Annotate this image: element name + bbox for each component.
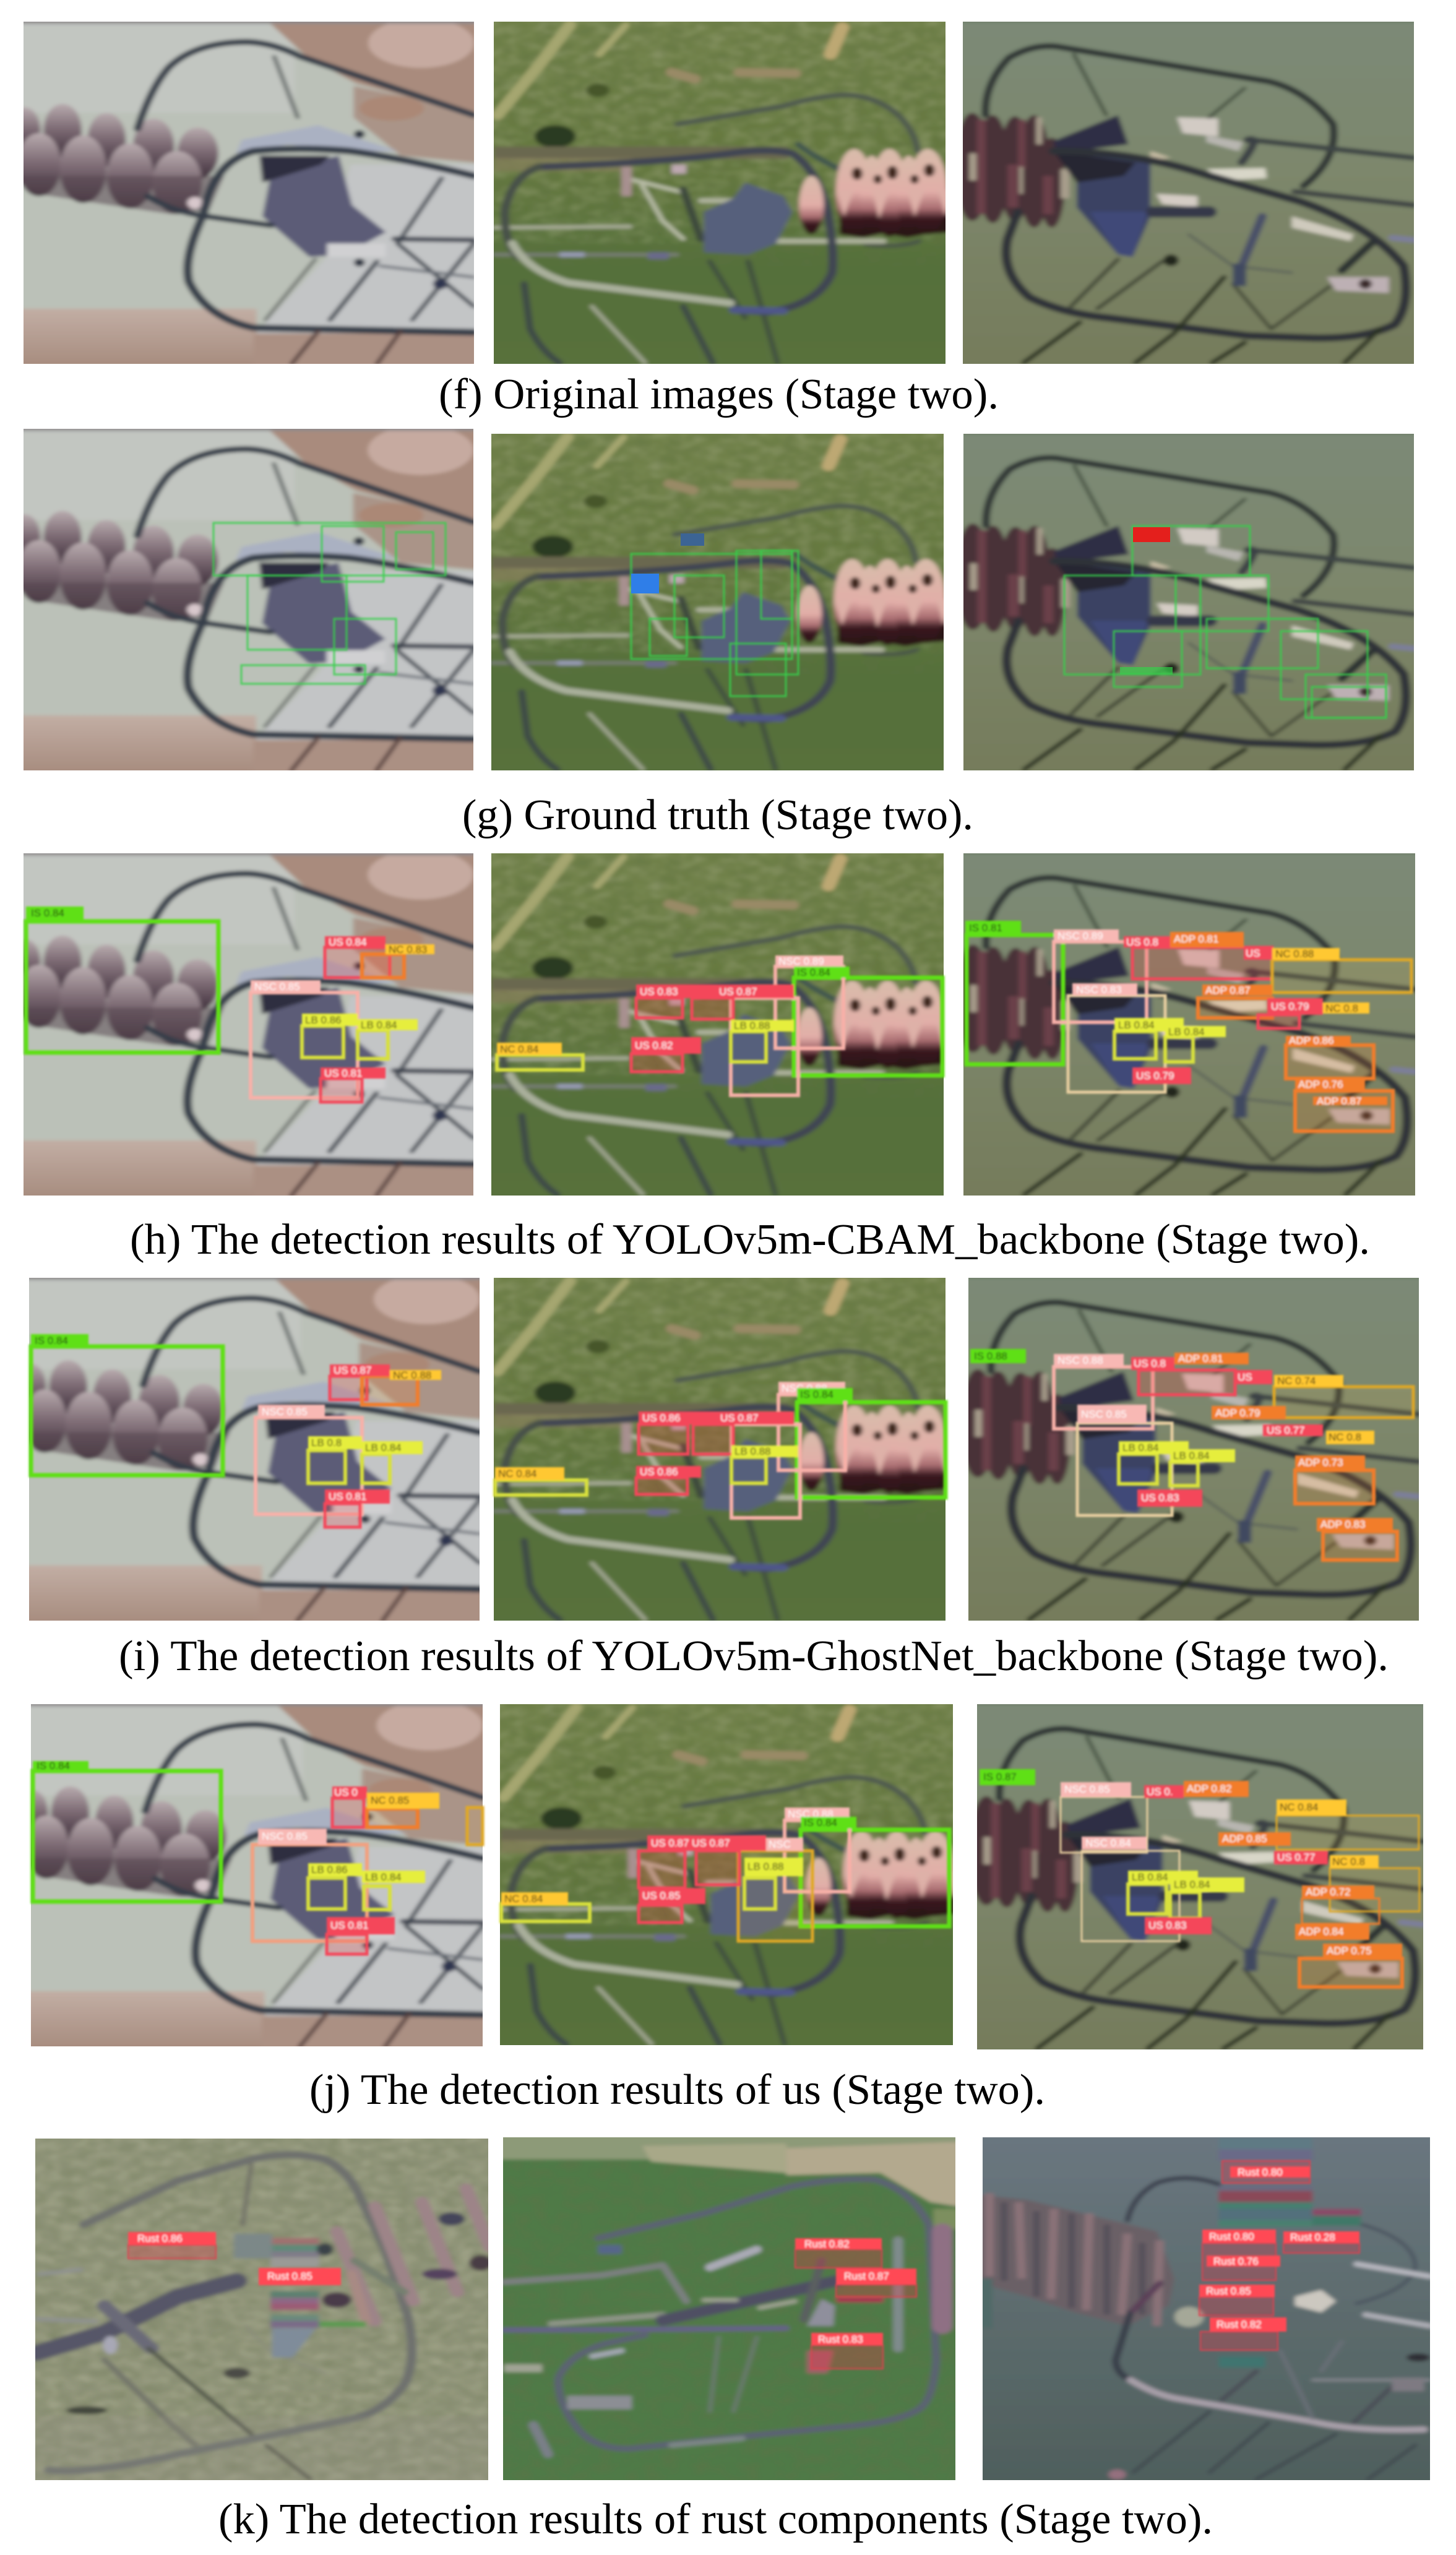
detections: ADP 0.86 bbox=[1289, 1035, 1333, 1046]
detections bbox=[497, 955, 942, 1095]
detections: LB 0.84 bbox=[1132, 1871, 1168, 1883]
detections: NSC 0.89 bbox=[1058, 930, 1103, 942]
detections: US 0.84 bbox=[329, 936, 366, 948]
detections: NSC 0.88 bbox=[1058, 1355, 1103, 1366]
detections: NSC 0.88 bbox=[782, 1382, 827, 1394]
rust detections bbox=[795, 2238, 916, 2369]
detections: LB 0.84 bbox=[365, 1871, 402, 1883]
caption i: (i) The detection results of YOLOv5m-GhostNet_backbone (Stage two). bbox=[119, 1632, 1389, 1680]
detections: ADP 0.82 bbox=[1187, 1783, 1231, 1795]
detections: US bbox=[1238, 1371, 1252, 1383]
detections: ADP 0.76 bbox=[1298, 1079, 1343, 1090]
row j: our detection results bbox=[8, 1687, 1451, 2064]
detections: US 0.83 bbox=[1148, 1919, 1186, 1931]
detections: NC 0.84 bbox=[504, 1893, 543, 1905]
detections: LB 0.84 bbox=[361, 1019, 397, 1031]
rust detections: Rust 0.83 bbox=[818, 2333, 863, 2345]
row h: YOLOv5m-CBAM_backbone bbox=[1, 837, 1443, 1210]
image: original scene one bbox=[1, 5, 501, 379]
panel: our results scene two bbox=[477, 1687, 980, 2060]
detections: IS 0.84 bbox=[797, 967, 830, 978]
detections: US 0.77 bbox=[1277, 1851, 1315, 1863]
detections: IS 0.84 bbox=[800, 1389, 834, 1400]
panel: rust scene two bbox=[480, 2121, 980, 2495]
detections: US 0.86 bbox=[640, 1466, 678, 1478]
detections: US 0.77 bbox=[1267, 1424, 1304, 1436]
detections bbox=[26, 907, 434, 1102]
detections: US 0.85 bbox=[642, 1890, 680, 1902]
detections: ADP 0.87 bbox=[1317, 1095, 1361, 1107]
detections: IS 0.84 bbox=[804, 1817, 837, 1829]
detections: US 0.83 bbox=[640, 986, 678, 997]
detections: LB 0.86 bbox=[311, 1864, 348, 1876]
detections: LB 0.84 bbox=[1168, 1026, 1205, 1038]
ground truth boxes two bbox=[631, 551, 798, 696]
detections: NC 0.8 bbox=[1325, 1002, 1358, 1014]
detections: NSC bbox=[769, 1838, 791, 1850]
rust detections: Rust 0.28 bbox=[1290, 2231, 1335, 2243]
detections: LB 0.88 bbox=[747, 1861, 784, 1872]
detections: US 0.81 bbox=[324, 1067, 362, 1079]
caption h: (h) The detection results of YOLOv5m-CBAM_backbone (Stage two). bbox=[130, 1216, 1370, 1264]
detections: ADP 0.72 bbox=[1306, 1886, 1350, 1898]
detections: NC 0.8 bbox=[1329, 1431, 1361, 1443]
panel: ground truth scene one bbox=[1, 412, 500, 785]
panel: CBAM scene two bbox=[468, 837, 970, 1210]
detections: NC 0.88 bbox=[393, 1369, 431, 1381]
detections bbox=[965, 921, 1411, 1131]
detections: LB 0.84 bbox=[365, 1442, 402, 1454]
row k: rust component detections bbox=[13, 2121, 1456, 2495]
detections: US 0.81 bbox=[330, 1919, 368, 1931]
detections: US 0.83 bbox=[1141, 1492, 1179, 1504]
detections: US 0.87 bbox=[720, 1412, 758, 1424]
detections: US 0.87 bbox=[719, 986, 757, 997]
detections: US 0.87 bbox=[334, 1364, 371, 1376]
panel: CBAM scene one bbox=[1, 837, 500, 1210]
detections: LB 0.84 bbox=[1118, 1019, 1155, 1031]
caption g: (g) Ground truth (Stage two). bbox=[462, 791, 973, 839]
detections bbox=[970, 1349, 1413, 1560]
panel: GhostNet scene two bbox=[471, 1261, 972, 1635]
detections: ADP 0.84 bbox=[1299, 1926, 1343, 1937]
detections: US 0.8 bbox=[1126, 936, 1158, 948]
rust detections: Rust 0.86 bbox=[137, 2233, 183, 2244]
rust detections: Rust 0.82 bbox=[1217, 2319, 1262, 2330]
detections: ADP 0.87 bbox=[1205, 985, 1250, 996]
detections: NSC 0.85 bbox=[254, 981, 300, 993]
detections: LB 0.88 bbox=[734, 1446, 771, 1457]
detections: NSC 0.85 bbox=[1081, 1408, 1127, 1420]
detections: ADP 0.79 bbox=[1215, 1407, 1260, 1419]
detections: NSC 0.84 bbox=[1085, 1837, 1131, 1849]
ground truth marker green bbox=[1120, 667, 1173, 674]
panel: GhostNet scene three bbox=[947, 1261, 1447, 1635]
detections: ADP 0.83 bbox=[1320, 1519, 1365, 1530]
detections: US 0.81 bbox=[329, 1491, 366, 1502]
caption f: (f) Original images (Stage two). bbox=[439, 371, 999, 418]
rust detections bbox=[128, 2232, 341, 2285]
detections: NC 0.88 bbox=[1275, 948, 1314, 960]
panel: GhostNet scene one bbox=[6, 1261, 506, 1635]
detections: IS 0.88 bbox=[974, 1350, 1007, 1362]
rust detections: Rust 0.76 bbox=[1213, 2256, 1259, 2267]
detections: IS 0.87 bbox=[983, 1771, 1017, 1783]
row i: YOLOv5m-GhostNet_backbone bbox=[6, 1261, 1447, 1635]
rust detections bbox=[1199, 2161, 1359, 2350]
image: original scene three bbox=[941, 5, 1442, 379]
detections: US 0.79 bbox=[1136, 1070, 1174, 1082]
detections: US 0.82 bbox=[635, 1040, 673, 1051]
detections: NC 0.74 bbox=[1277, 1375, 1316, 1387]
detections bbox=[980, 1769, 1419, 1987]
detections: NC 0.84 bbox=[498, 1468, 536, 1480]
detections: US bbox=[1246, 947, 1260, 959]
panel: ground truth scene three bbox=[942, 417, 1442, 785]
detections: ADP 0.85 bbox=[1222, 1833, 1267, 1845]
rust detections: Rust 0.80 bbox=[1209, 2231, 1254, 2243]
detections: LB 0.86 bbox=[305, 1014, 342, 1026]
detections: US 0. bbox=[1147, 1786, 1173, 1798]
detections: NC 0.84 bbox=[1280, 1801, 1318, 1813]
detections bbox=[31, 1334, 441, 1527]
row g: ground truth bbox=[1, 412, 1442, 785]
ground truth boxes three bbox=[1064, 526, 1386, 718]
rust detections: Rust 0.87 bbox=[844, 2270, 889, 2282]
panel: our results scene three bbox=[956, 1687, 1451, 2064]
panel: rust scene one bbox=[13, 2121, 513, 2495]
detections: NSC 0.89 bbox=[778, 955, 824, 967]
detections: LB 0.8 bbox=[311, 1437, 342, 1449]
detections: NC 0.85 bbox=[371, 1795, 409, 1806]
rust detections: Rust 0.85 bbox=[1206, 2285, 1251, 2297]
caption k: (k) The detection results of rust components (Stage two). bbox=[218, 2496, 1213, 2543]
detections: US 0.86 bbox=[642, 1412, 680, 1424]
rust detections: Rust 0.82 bbox=[804, 2238, 850, 2250]
detections bbox=[495, 1382, 946, 1518]
detections: IS 0.84 bbox=[35, 1335, 68, 1346]
detections: ADP 0.81 bbox=[1178, 1353, 1223, 1364]
detections: US 0.8 bbox=[1134, 1358, 1166, 1369]
rust detections: Rust 0.80 bbox=[1238, 2166, 1283, 2178]
detections: NSC 0.85 bbox=[1064, 1783, 1110, 1795]
panel: ground truth scene two bbox=[468, 417, 970, 785]
detections bbox=[501, 1807, 949, 1941]
detections: US 0.79 bbox=[1271, 1001, 1309, 1012]
detections: ADP 0.81 bbox=[1174, 933, 1218, 945]
detections: ADP 0.75 bbox=[1327, 1945, 1371, 1957]
detections: NSC 0.88 bbox=[788, 1808, 834, 1820]
row f: original images bbox=[1, 5, 1442, 379]
panel: CBAM scene three bbox=[942, 837, 1443, 1210]
detections: US 0.87 US 0.87 bbox=[651, 1837, 730, 1849]
detections: IS 0.81 bbox=[969, 922, 1002, 934]
detections bbox=[33, 1760, 483, 1954]
rust detections: Rust 0.85 bbox=[267, 2270, 312, 2282]
detections: LB 0.84 bbox=[1122, 1442, 1159, 1454]
detections: NC 0.83 bbox=[389, 944, 427, 955]
panel: rust scene three bbox=[957, 2121, 1456, 2495]
detections: LB 0.84 bbox=[1173, 1450, 1210, 1462]
detections: ADP 0.73 bbox=[1298, 1457, 1343, 1468]
detections: NSC 0.85 bbox=[262, 1406, 308, 1418]
detections: NSC 0.85 bbox=[262, 1830, 308, 1842]
ground truth class marker dark blue bbox=[681, 533, 704, 546]
detections: IS 0.84 bbox=[31, 907, 64, 919]
detections: LB 0.84 bbox=[1174, 1879, 1210, 1890]
ground truth class marker blue bbox=[631, 574, 659, 593]
detections: NC 0.84 bbox=[500, 1043, 538, 1055]
detections: NC 0.8 bbox=[1332, 1856, 1365, 1868]
caption j: (j) The detection results of us (Stage two). bbox=[309, 2066, 1045, 2114]
detections: LB 0.88 bbox=[734, 1020, 770, 1032]
detections: NSC 0.83 bbox=[1076, 984, 1122, 996]
ground truth class marker red bbox=[1133, 527, 1170, 542]
ground truth boxes one bbox=[213, 523, 446, 684]
detections: IS 0.84 bbox=[37, 1760, 70, 1772]
image: original scene two bbox=[471, 5, 972, 379]
detections: US 0 bbox=[334, 1786, 358, 1798]
panel: our results scene one bbox=[8, 1687, 509, 2061]
